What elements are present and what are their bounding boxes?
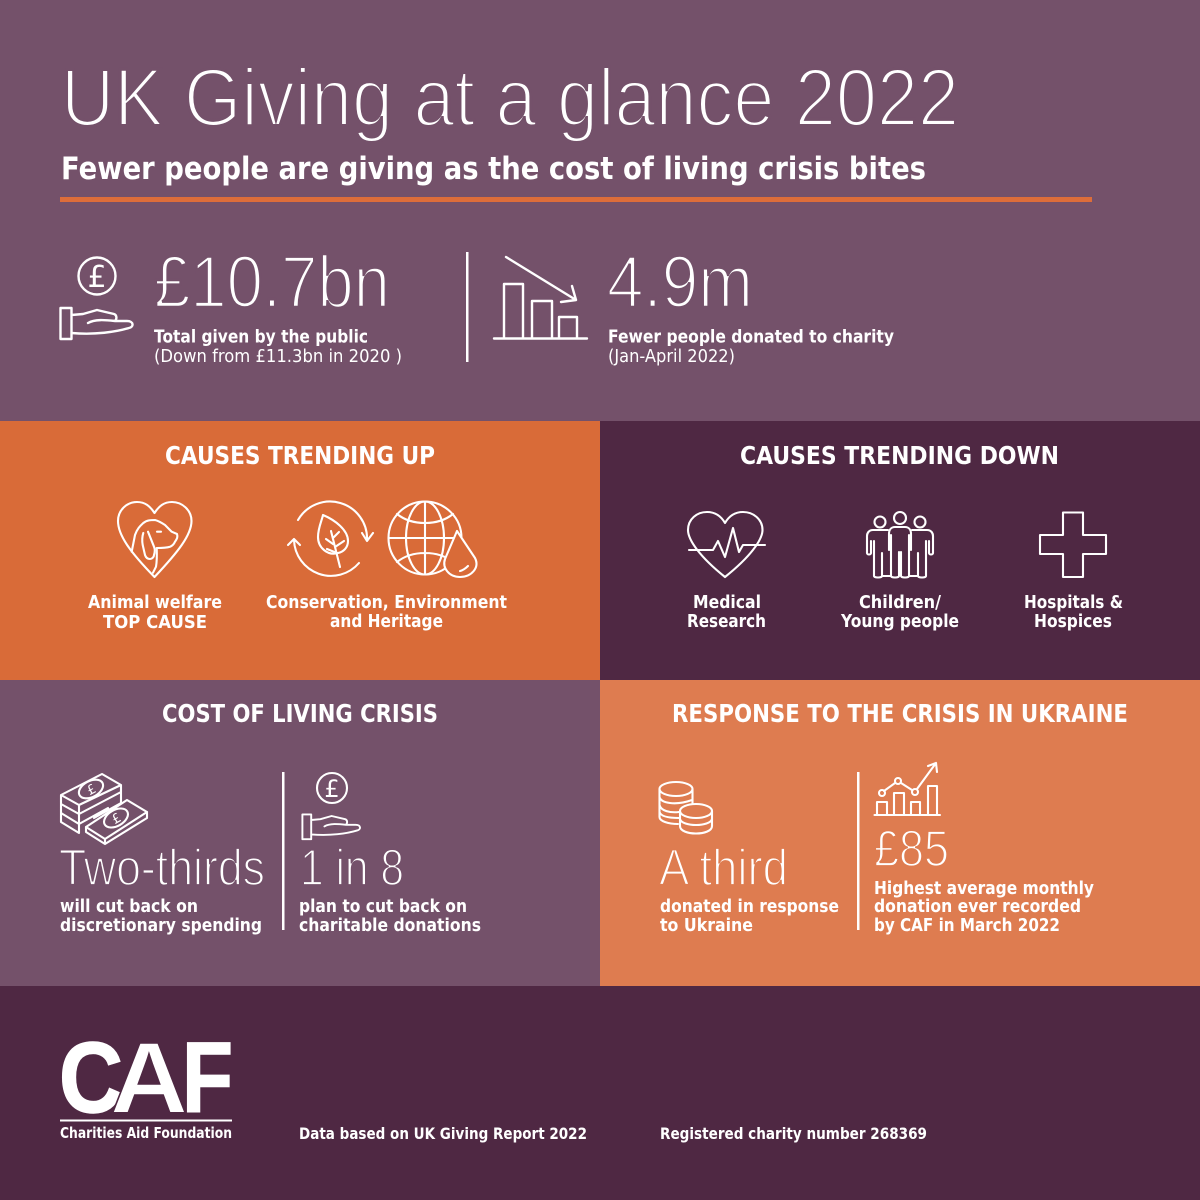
stat: a third [659, 839, 839, 936]
stat: £85: £85 [874, 820, 949, 877]
logo: Charities Aid Foundation: C [59, 1022, 123, 1134]
label: hospitals: Hospitals & [1024, 593, 1123, 613]
icon: dog in heart [118, 502, 192, 577]
stat: fewer donors: Fewer people donated to charity [608, 328, 895, 348]
label: conservation: and Heritage [330, 612, 443, 632]
icon: rising chart [874, 763, 940, 815]
stat: fewer donors [607, 242, 895, 367]
stat: 1 in 8: charitable donations [299, 916, 481, 936]
icon: banknotes: £ [109, 811, 124, 828]
logo: Charities Aid Foundation: Charities Aid Foundation [60, 1124, 232, 1142]
orange rule [60, 197, 1092, 202]
stat: fewer donors: 4.9m [607, 242, 753, 323]
stat: two-thirds [59, 839, 265, 936]
logo: Charities Aid Foundation [59, 1022, 233, 1142]
label: conservation: Conservation, Environment [266, 593, 507, 613]
panel: cost of living crisis [0, 680, 600, 986]
icon: recycling leaf [288, 502, 373, 576]
label: children [840, 593, 959, 632]
label: animal welfare: Animal welfare [88, 593, 222, 613]
logo: Charities Aid Foundation: A [110, 1023, 188, 1135]
icon: banknotes [61, 774, 147, 844]
icon: three people [867, 512, 933, 578]
stat: £85: Highest average monthly [874, 879, 1095, 899]
label: animal welfare: TOP CAUSE [103, 613, 207, 633]
stat: a third: to Ukraine [660, 916, 753, 936]
heading: COST OF LIVING CRISIS [162, 699, 438, 728]
label: hospitals [1024, 593, 1123, 632]
panel: response to Ukraine crisis [600, 680, 1200, 986]
stat: 1 in 8: 1 in 8 [300, 839, 404, 896]
panel: causes trending down [600, 421, 1200, 680]
icon: hand with pound coin: £ [324, 775, 340, 803]
label: children: Children/ [859, 593, 942, 613]
panel: footer [0, 986, 1200, 1200]
icon: hand holding pound coin [60, 258, 133, 339]
stat: total given: £10.7bn [154, 242, 390, 323]
label: children: Young people [840, 612, 959, 632]
heading: CAUSES TRENDING DOWN [740, 441, 1059, 470]
stat: £85: donation ever recorded [874, 897, 1081, 917]
icon: coin stacks [660, 782, 712, 834]
stat: 1 in 8 [299, 839, 481, 936]
icon: heart with pulse [688, 512, 765, 577]
icon: hand holding pound coin: £ [87, 260, 107, 295]
icon: medical cross [1040, 512, 1106, 577]
icon: banknotes: £ [85, 782, 99, 799]
stat: total given: (Down from £11.3bn in 2020 ) [154, 347, 402, 367]
logo: Charities Aid Foundation: F [182, 1022, 233, 1134]
panel: causes trending up [0, 421, 600, 680]
heading: CAUSES TRENDING UP [165, 441, 435, 470]
stat: two-thirds: Two-thirds [59, 839, 265, 896]
label: medical research [687, 593, 766, 632]
charity number: Registered charity number 268369 [660, 1124, 927, 1143]
stat: two-thirds: discretionary spending [60, 916, 262, 936]
stat: £85: by CAF in March 2022 [874, 916, 1060, 936]
stat: two-thirds: will cut back on [60, 897, 198, 917]
icon: globe and water drop [388, 502, 476, 577]
label: conservation [266, 593, 507, 632]
stat: a third: donated in response [660, 897, 839, 917]
label: medical research: Research [687, 612, 766, 632]
title: UK Giving at a glance 2022 [61, 52, 959, 144]
stat: a third: A third [659, 839, 788, 896]
label: hospitals: Hospices [1034, 612, 1112, 632]
subtitle: Fewer people are giving as the cost of living crisis bites [61, 151, 926, 187]
label: animal welfare [88, 593, 222, 633]
stat: total given: Total given by the public [154, 328, 368, 348]
stat: total given [154, 242, 402, 367]
icon: falling bar chart [494, 257, 587, 338]
label: medical research: Medical [693, 593, 761, 613]
stat: 1 in 8: plan to cut back on [299, 897, 467, 917]
stat: fewer donors: (Jan-April 2022) [608, 347, 735, 367]
panel: header [0, 0, 1200, 421]
source note: Data based on UK Giving Report 2022 [299, 1124, 587, 1143]
stat: £85 [874, 820, 1095, 936]
icon: hand with pound coin [302, 773, 360, 839]
heading: RESPONSE TO THE CRISIS IN UKRAINE [672, 699, 1128, 728]
